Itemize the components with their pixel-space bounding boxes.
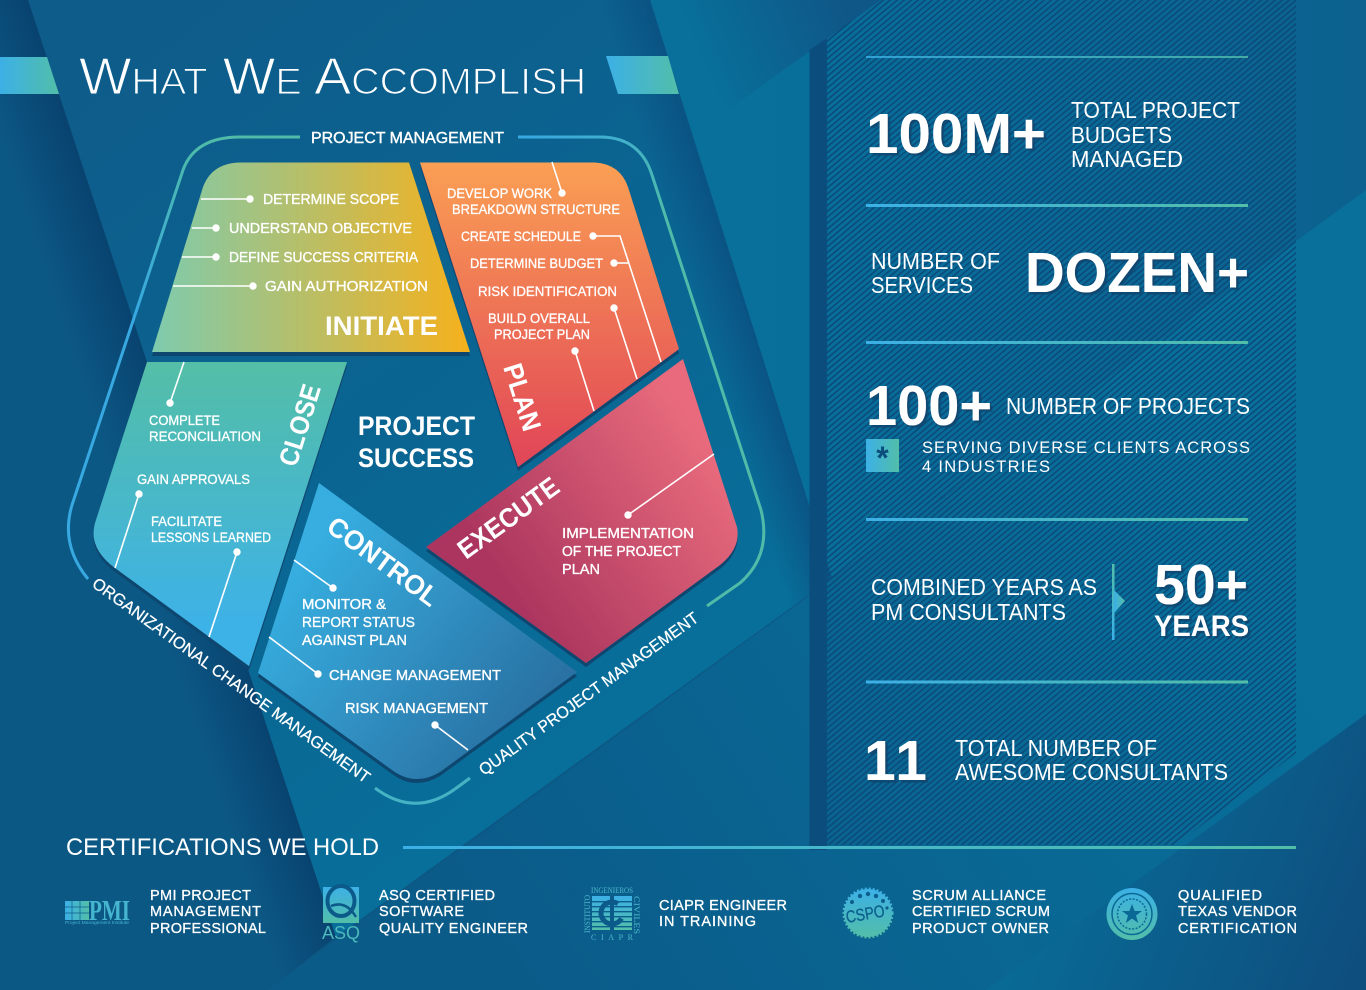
center label: project success (358, 411, 475, 473)
panel: control: CONTROL (321, 511, 445, 613)
panel: control: MONITOR & (302, 597, 386, 613)
stat: 100+ projects: 4 INDUSTRIES (922, 458, 1050, 476)
title ribbon right (606, 56, 679, 94)
panel: close (94, 362, 347, 666)
cert: Texas: TEXAS VENDOR (1178, 904, 1297, 920)
panel: plan: CREATE SCHEDULE (461, 229, 581, 244)
cert: CSPO: CERTIFIED SCRUM (912, 904, 1050, 920)
icon: asterisk box: * (876, 440, 889, 476)
panel: initiate: DEFINE SUCCESS CRITERIA (229, 250, 418, 266)
panel: close: LESSONS LEARNED (151, 530, 271, 545)
cert: PMI (65, 888, 266, 937)
cert: CIAPR: CIAPR ENGINEER (659, 898, 787, 914)
panel: control: RISK MANAGEMENT (345, 701, 488, 717)
cert: PMI: PROFESSIONAL (150, 921, 266, 937)
cert: CIAPR (582, 885, 787, 942)
title: WHAT WE ACCOMPLISH (79, 48, 586, 106)
stat: 50+ years (871, 553, 1249, 643)
stat: 100+ projects: NUMBER OF PROJECTS (1006, 393, 1250, 419)
panel: plan: PLAN (497, 360, 547, 435)
panel: plan: DEVELOP WORK (447, 186, 552, 201)
ring label: project management: PROJECT MANAGEMENT (311, 130, 504, 147)
panel: execute: IMPLEMENTATION (562, 526, 694, 542)
panel: initiate: UNDERSTAND OBJECTIVE (229, 221, 412, 237)
stat: dozen+ services: SERVICES (871, 272, 973, 298)
stat: 50+ years: YEARS (1154, 610, 1249, 643)
panel: plan: DETERMINE BUDGET (470, 256, 603, 271)
panel: initiate: GAIN AUTHORIZATION (265, 279, 428, 295)
panel: initiate: INITIATE (325, 311, 438, 341)
panel: close: RECONCILIATION (149, 429, 261, 444)
stat: 100M+ budgets: MANAGED (1071, 146, 1183, 172)
panel: plan: PROJECT PLAN (494, 327, 590, 342)
stat: 50+ years: 50+ (1154, 553, 1248, 617)
cert: ASQ: QUALITY ENGINEER (379, 921, 528, 937)
icon: PMI logo: PMI (89, 895, 130, 927)
stat: dozen+ services: NUMBER OF (871, 248, 1000, 274)
panel: initiate (152, 162, 470, 352)
stat: 11 consultants: AWESOME CONSULTANTS (955, 759, 1228, 785)
stat: 100M+ budgets: 100M+ (866, 102, 1046, 166)
panel: close: FACILITATE (151, 514, 222, 529)
panel: execute: EXECUTE (452, 471, 565, 565)
certifications rule (403, 846, 1296, 849)
icon: CIAPR logo: CIAPR (591, 933, 634, 942)
stat: 50+ years: COMBINED YEARS AS (871, 574, 1097, 600)
panel: control: CHANGE MANAGEMENT (329, 668, 501, 684)
icon: CIAPR logo: INGENIEROS (591, 885, 633, 895)
stat: dozen+ services (871, 241, 1249, 305)
panel: close: GAIN APPROVALS (137, 472, 250, 487)
dividers (866, 56, 1248, 684)
icon: PMI logo (65, 895, 130, 927)
cert: Texas: CERTIFICATION (1178, 921, 1297, 937)
icon: PMI logo: Project Management Institute (65, 920, 130, 925)
stat: 11 consultants: 11 (864, 729, 927, 793)
icon: ASQ logo (322, 886, 360, 943)
ring label: quality project management: QUALITY PROJECT MANAGEMENT (476, 609, 702, 779)
icon: CIAPR logo: CIVILES (632, 896, 642, 934)
cert: PMI: MANAGEMENT (150, 904, 261, 920)
stat: 100+ projects: 100+ (866, 374, 992, 438)
stat: 11 consultants (864, 729, 1228, 793)
stat: 100M+ budgets (866, 97, 1240, 172)
panel: control: REPORT STATUS (302, 615, 415, 631)
center label: project success: SUCCESS (358, 443, 474, 473)
stat: 100+ projects: SERVING DIVERSE CLIENTS ACROSS (922, 439, 1250, 457)
panel: execute (426, 359, 738, 663)
cert: CIAPR: IN TRAINING (659, 914, 756, 930)
icon: divider arrow (1112, 564, 1125, 640)
cert: Texas (1106, 888, 1297, 940)
panel: plan: BUILD OVERALL (488, 311, 590, 326)
icon: ASQ logo: ASQ (322, 923, 360, 943)
decorative band (810, 38, 827, 850)
icon: CIAPR logo: INSTITUTO (582, 895, 592, 933)
stat: dozen+ services: DOZEN+ (1025, 241, 1249, 305)
stat: 11 consultants: TOTAL NUMBER OF (955, 735, 1157, 761)
panel: initiate: DETERMINE SCOPE (263, 192, 399, 208)
cert: CSPO: SCRUM ALLIANCE (912, 888, 1046, 904)
panel: close: COMPLETE (149, 413, 220, 428)
ring label: organizational change management: ORGANIZATIONAL CHANGE MANAGEMENT (89, 575, 373, 787)
cert: ASQ: ASQ CERTIFIED (379, 888, 495, 904)
cert: CSPO (844, 888, 1050, 938)
heading: certifications: CERTIFICATIONS WE HOLD (66, 834, 379, 861)
center label: project success: PROJECT (358, 411, 475, 441)
panel: execute: OF THE PROJECT (562, 544, 681, 560)
icon: asterisk box (866, 439, 899, 476)
panel: execute: PLAN (562, 562, 600, 578)
title ribbon left (0, 57, 59, 94)
panel: stats hatch background (827, 0, 1296, 845)
panel: control: AGAINST PLAN (302, 633, 407, 649)
cert: ASQ: SOFTWARE (379, 904, 464, 920)
cert: ASQ (322, 886, 528, 943)
stat: 50+ years: PM CONSULTANTS (871, 599, 1066, 625)
panel: plan: RISK IDENTIFICATION (478, 284, 617, 299)
cert: Texas: QUALIFIED (1178, 888, 1262, 904)
icon: CSPO badge (844, 888, 892, 938)
panel: control (258, 483, 577, 779)
panel: close: CLOSE (273, 381, 327, 470)
stat: 100+ projects (866, 374, 1250, 476)
panel: plan: BREAKDOWN STRUCTURE (452, 202, 620, 217)
stat: 100M+ budgets: TOTAL PROJECT (1071, 97, 1240, 123)
panel: plan (420, 162, 679, 467)
stat: 100M+ budgets: BUDGETS (1071, 122, 1172, 148)
cert: CSPO: PRODUCT OWNER (912, 921, 1049, 937)
cert: PMI: PMI PROJECT (150, 888, 251, 904)
icon: CIAPR logo (582, 885, 642, 942)
icon: CSPO badge: CSPO (844, 901, 886, 927)
icon: Texas seal (1106, 888, 1158, 940)
ring: project management frame (68, 137, 764, 803)
